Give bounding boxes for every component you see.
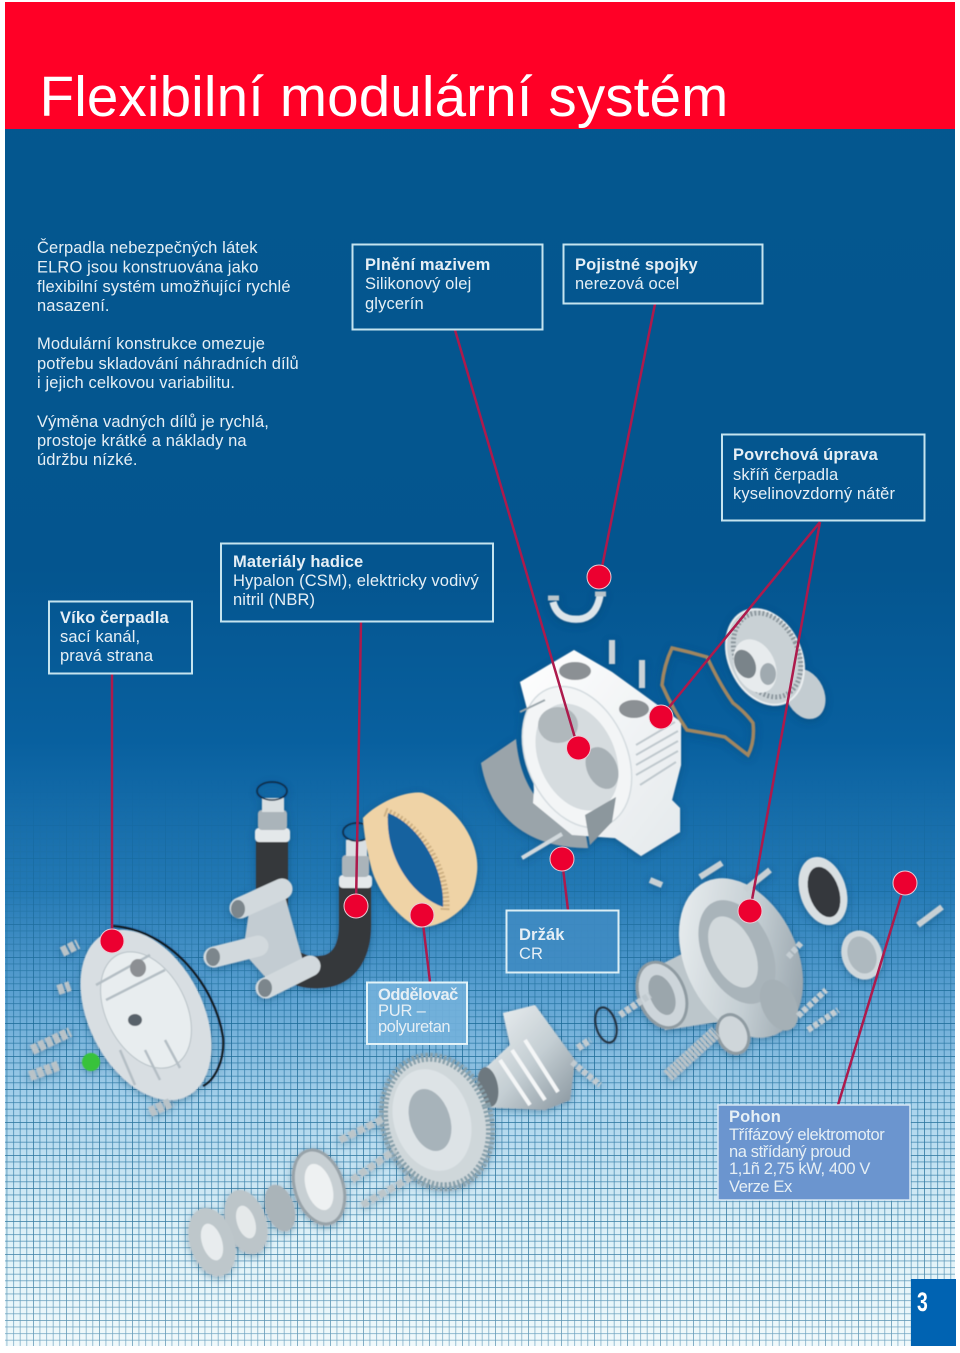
callout: Plnění mazivem: Silikonový olej bbox=[365, 275, 471, 293]
page number: 3 bbox=[917, 1287, 928, 1317]
title banner bbox=[5, 2, 955, 129]
part: motor bell bbox=[475, 995, 650, 1110]
callout: Plnění mazivem: Plnění mazivem bbox=[365, 256, 490, 274]
callout: Povrchová úprava bbox=[722, 434, 924, 520]
callout: Oddělovač bbox=[367, 982, 467, 1044]
callout: Pojistné spojky: nerezová ocel bbox=[575, 275, 679, 293]
callout: Držák: Držák bbox=[519, 926, 565, 944]
callout: Pojistné spojky bbox=[564, 244, 762, 304]
part: motor housing plate bbox=[628, 858, 838, 1076]
part: gasket bbox=[662, 648, 753, 755]
callout: Materiály hadice: nitril (NBR) bbox=[233, 591, 315, 609]
callout: Plnění mazivem bbox=[352, 244, 542, 330]
intro text: nasazení. bbox=[37, 297, 110, 315]
part: large gear bbox=[340, 1043, 507, 1205]
part: white pump housing bbox=[501, 640, 681, 858]
callout: Pohon: 1,1ñ 2,75 kW, 400 V bbox=[729, 1160, 870, 1178]
part: cup and small bearings bbox=[650, 851, 942, 981]
callout: Víko čerpadla: sací kanál, bbox=[60, 628, 140, 646]
part: hose manifold bbox=[206, 889, 310, 997]
leader lines bbox=[112, 304, 905, 1105]
intro text bbox=[37, 238, 299, 469]
part: grey separator band bbox=[481, 739, 588, 848]
intro text: prostoje krátké a náklady na bbox=[37, 432, 247, 450]
callout: Materiály hadice bbox=[221, 544, 493, 622]
callout: Pojistné spojky: Pojistné spojky bbox=[575, 256, 699, 274]
part: pump cover bbox=[30, 908, 238, 1122]
callout: Držák: CR bbox=[519, 945, 543, 963]
callout: Oddělovač: PUR – bbox=[378, 1002, 427, 1020]
callout: Povrchová úprava: kyselinovzdorný nátěr bbox=[733, 485, 895, 503]
intro text: i jejich celkovou variabilitu. bbox=[37, 374, 235, 392]
callout: Oddělovač: Oddělovač bbox=[378, 986, 458, 1004]
page number bbox=[911, 1279, 956, 1346]
callout: Pohon: Pohon bbox=[729, 1108, 781, 1126]
callout: Pohon: na střídaný proud bbox=[729, 1143, 851, 1161]
callout: Materiály hadice: Hypalon (CSM), elektricky vodivý bbox=[233, 572, 480, 590]
callout: Povrchová úprava: Povrchová úprava bbox=[733, 446, 879, 464]
exploded pump parts bbox=[30, 594, 942, 1282]
marker dots bbox=[100, 565, 917, 953]
callout: Pohon: Třífázový elektromotor bbox=[729, 1126, 885, 1144]
callout: Oddělovač: polyuretan bbox=[378, 1018, 450, 1036]
title: Flexibilní modulární systém bbox=[40, 65, 728, 128]
callout: Víko čerpadla bbox=[49, 602, 192, 674]
part: small gear housing bbox=[711, 596, 833, 726]
part: top bracket bbox=[548, 594, 606, 619]
part: beige separator belt bbox=[363, 792, 477, 927]
intro text: potřebu skladování náhradních dílů bbox=[37, 355, 299, 373]
part: hose bbox=[255, 782, 372, 972]
callout: Držák bbox=[506, 910, 618, 972]
callout: Víko čerpadla: pravá strana bbox=[60, 647, 154, 665]
callout: Pohon: Verze Ex bbox=[729, 1178, 793, 1196]
callout: Pohon bbox=[718, 1105, 910, 1200]
intro text: flexibilní systém umožňující rychlé bbox=[37, 278, 291, 296]
intro text: údržbu nízké. bbox=[37, 451, 138, 469]
callout: Povrchová úprava: skříň čerpadla bbox=[733, 466, 839, 484]
intro text: Výměna vadných dílů je rychlá, bbox=[37, 413, 269, 431]
intro text: Modulární konstrukce omezuje bbox=[37, 335, 265, 353]
callout: Plnění mazivem: glycerín bbox=[365, 295, 424, 313]
callout: Víko čerpadla: Víko čerpadla bbox=[60, 609, 170, 627]
part: bearings bbox=[180, 1143, 354, 1282]
intro text: ELRO jsou konstruována jako bbox=[37, 258, 259, 276]
callout: Materiály hadice: Materiály hadice bbox=[233, 553, 363, 571]
intro text: Čerpadla nebezpečných látek bbox=[37, 238, 258, 257]
